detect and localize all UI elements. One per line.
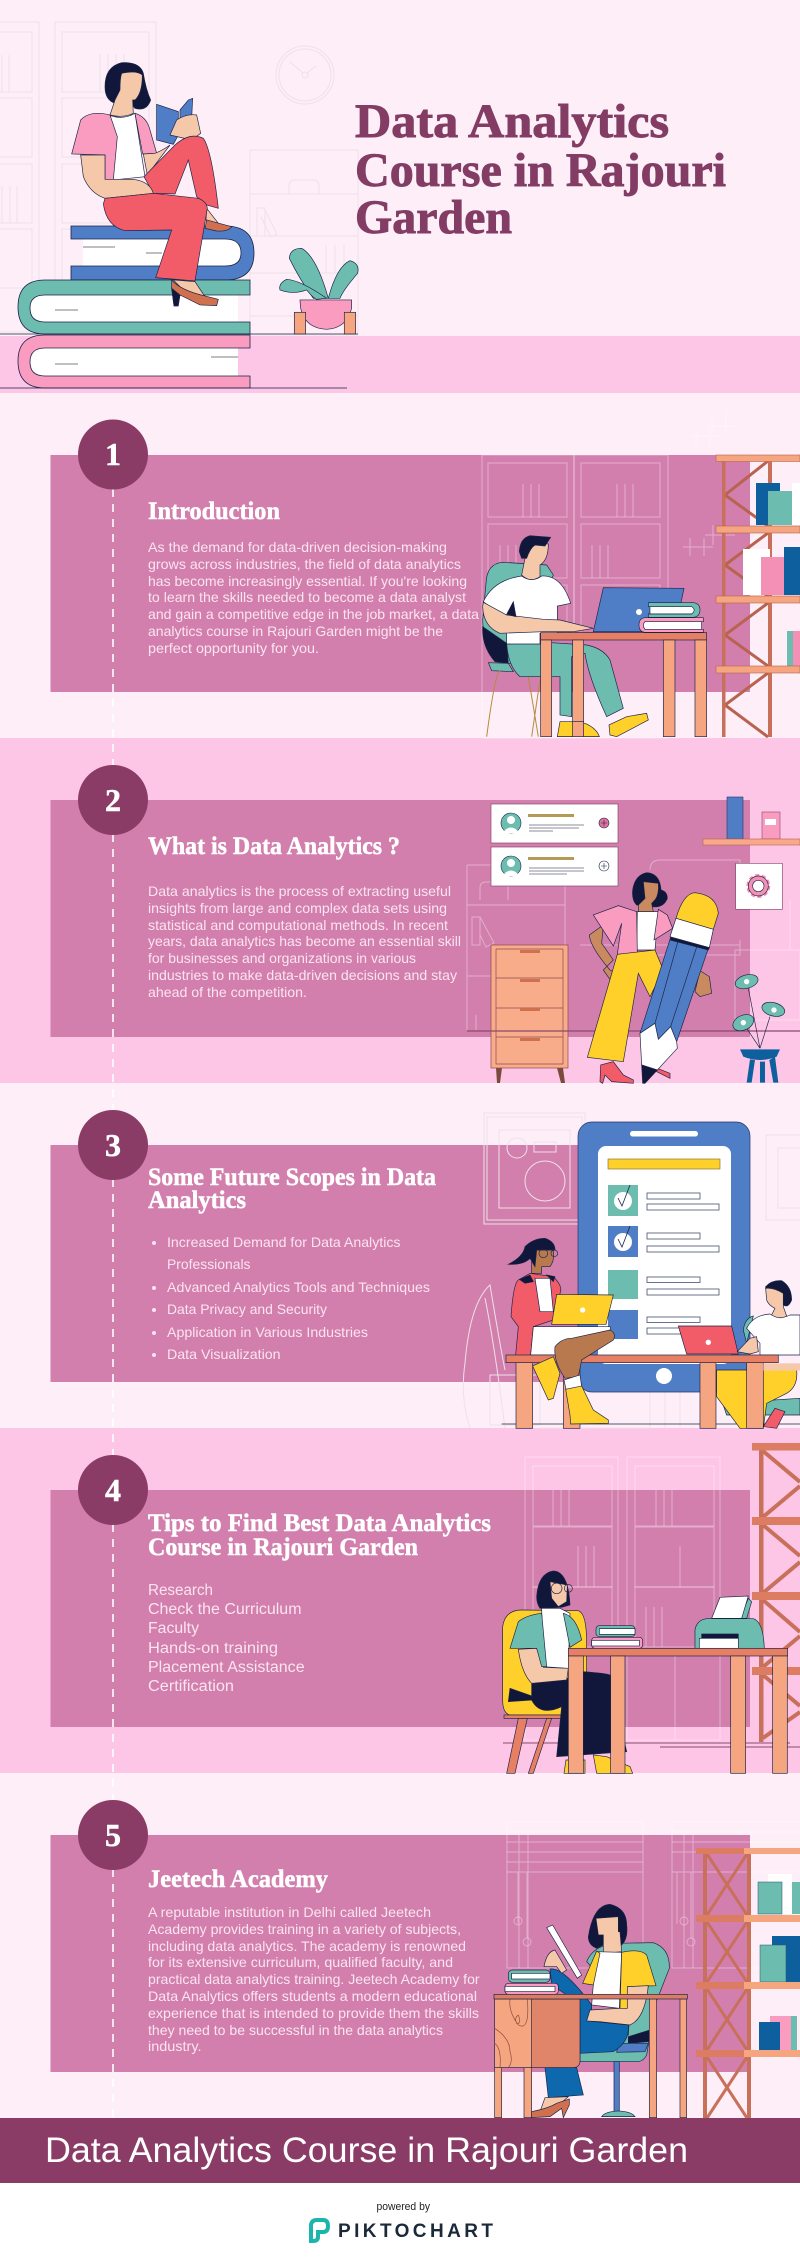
section 5 body text: practical data analytics training. Jeetech Academy for — [148, 1971, 480, 1987]
illustration: man at laptop — [483, 536, 707, 737]
section 4 heading: Course in Rajouri Garden — [148, 1534, 418, 1561]
badge numbers: 3 — [105, 1127, 121, 1163]
stack of books — [0, 226, 358, 388]
section 4 list: Check the Curriculum — [148, 1601, 302, 1618]
illustration: woman reading on books — [72, 63, 232, 306]
Piktochart wordmark: PIKTOCHART — [338, 2221, 493, 2242]
illustration: profile cards — [491, 804, 618, 886]
section 1 body text — [148, 539, 479, 656]
section 4 list: Certification — [148, 1678, 234, 1695]
section 1 background line art — [482, 412, 736, 738]
badge numbers: 4 — [105, 1472, 121, 1508]
illustration: woman at desk with printer — [503, 1571, 788, 1773]
header background line art: bookcases, clock, cabinet — [0, 22, 358, 335]
section 3 bullet list: Professionals — [167, 1256, 250, 1272]
section 3 bullet list: Application in Various Industries — [167, 1324, 368, 1340]
footer title band — [0, 2118, 800, 2183]
section 3 heading: Some Future Scopes in Data — [148, 1164, 436, 1191]
section 1 body text: and gain a competitive edge in the job market, a data — [148, 606, 479, 622]
illustration: filing cabinet — [491, 945, 568, 1083]
powered by label: powered by — [376, 2201, 430, 2213]
section 5 background line art: blinds — [507, 1822, 800, 1968]
section 1 body text: perfect opportunity for you. — [148, 640, 319, 656]
title: Course in Rajouri — [355, 144, 726, 197]
section 4 list: Faculty — [148, 1620, 199, 1637]
illustration: bookshelf section 5 — [696, 1848, 800, 2118]
badge numbers: 1 — [105, 436, 121, 472]
section 3 background line art — [463, 1113, 800, 1428]
section 2 body text — [148, 883, 461, 1000]
section 5 body text: they need to be successful in the data analytics — [148, 2022, 443, 2038]
section 2 body text: for businesses and organizations in various — [148, 950, 416, 966]
section 4 background line art — [525, 1457, 720, 1740]
section 5 body text: Data Analytics offers students a modern educational — [148, 1988, 477, 2004]
illustration: shelf section 4 — [752, 1443, 800, 1742]
badge numbers: 5 — [105, 1817, 121, 1853]
section 4 list — [148, 1582, 305, 1695]
section 4 list: Placement Assistance — [148, 1659, 305, 1676]
section 2 heading: What is Data Analytics ? — [148, 833, 400, 860]
section 1 body text: analytics course in Rajouri Garden might be the — [148, 623, 443, 639]
badge numbers: 2 — [105, 782, 121, 818]
section 3 bullet list: Data Privacy and Security — [167, 1301, 327, 1317]
section 2 body text: industries to make data-driven decisions and stay — [148, 967, 457, 983]
section 5 body text: Academy provides training in a variety of subjects, — [148, 1921, 461, 1937]
panel: card backgrounds — [50, 455, 750, 2072]
section 2 body text: Data analytics is the process of extracting useful — [148, 883, 451, 899]
illustration: phone with checklist — [578, 1122, 750, 1392]
timeline dashed line — [112, 489, 114, 2118]
section 1 body text: grows across industries, the field of data analytics — [148, 556, 461, 572]
section 5 heading: Jeetech Academy — [148, 1866, 328, 1893]
illustration: woman with tablet at desk — [494, 1904, 687, 2118]
floor lines section 4 — [503, 1743, 800, 1747]
section 1 body text: As the demand for data-driven decision-making — [148, 539, 447, 555]
section 4 heading — [148, 1510, 491, 1561]
title: Data Analytics — [355, 95, 669, 148]
section 1 heading: Introduction — [148, 498, 280, 525]
illustration: people at table — [502, 1238, 800, 1428]
section 5 body text: for its extensive curriculum, qualified faculty, and — [148, 1954, 453, 1970]
illustration: shelf with book and box — [703, 797, 800, 845]
illustration: bookshelf section 1 — [716, 455, 800, 737]
section 5 body text: including data analytics. The academy is renowned — [148, 1938, 466, 1954]
step badges — [78, 420, 148, 1870]
section 5 body text: A reputable institution in Delhi called Jeetech — [148, 1904, 431, 1920]
section 5 body text: industry. — [148, 2038, 202, 2054]
icon: Piktochart logo — [311, 2220, 328, 2241]
section 3 heading — [148, 1164, 436, 1214]
section 3 bullet list: Data Visualization — [167, 1346, 281, 1362]
section 2 body text: statistical and computational methods. In recent — [148, 917, 448, 933]
section 2 background line art — [467, 860, 800, 1030]
footer title band: Data Analytics Course in Rajouri Garden — [45, 2131, 688, 2170]
icon: potted plant — [280, 248, 358, 334]
badge numbers — [105, 436, 121, 1853]
section 2 body text: years, data analytics has become an essential skill — [148, 933, 461, 949]
floor line section 2 — [467, 1030, 800, 1032]
section 2 body text: insights from large and complex data sets using — [148, 900, 447, 916]
section 3 heading: Analytics — [148, 1187, 246, 1214]
section 4 heading: Tips to Find Best Data Analytics — [148, 1510, 491, 1537]
title — [355, 95, 726, 244]
section 3 bullet list: Advanced Analytics Tools and Techniques — [167, 1279, 430, 1295]
section 5 body text: experience that is intended to provide them the skills — [148, 2005, 479, 2021]
section 1 body text: has become increasingly essential. If you're looking — [148, 573, 467, 589]
section 4 list: Hands-on training — [148, 1640, 278, 1657]
section 3 bullet list — [152, 1234, 430, 1362]
section 2 body text: ahead of the competition. — [148, 984, 307, 1000]
section 1 body text: to learn the skills needed to become a data analyst — [148, 589, 466, 605]
section 4 list: Research — [148, 1582, 213, 1599]
section 5 body text — [148, 1904, 480, 2054]
illustration: woman with pencil, gear, plant and stool — [587, 863, 786, 1083]
section 3 bullet list: Increased Demand for Data Analytics — [167, 1234, 400, 1250]
title: Garden — [355, 191, 512, 244]
